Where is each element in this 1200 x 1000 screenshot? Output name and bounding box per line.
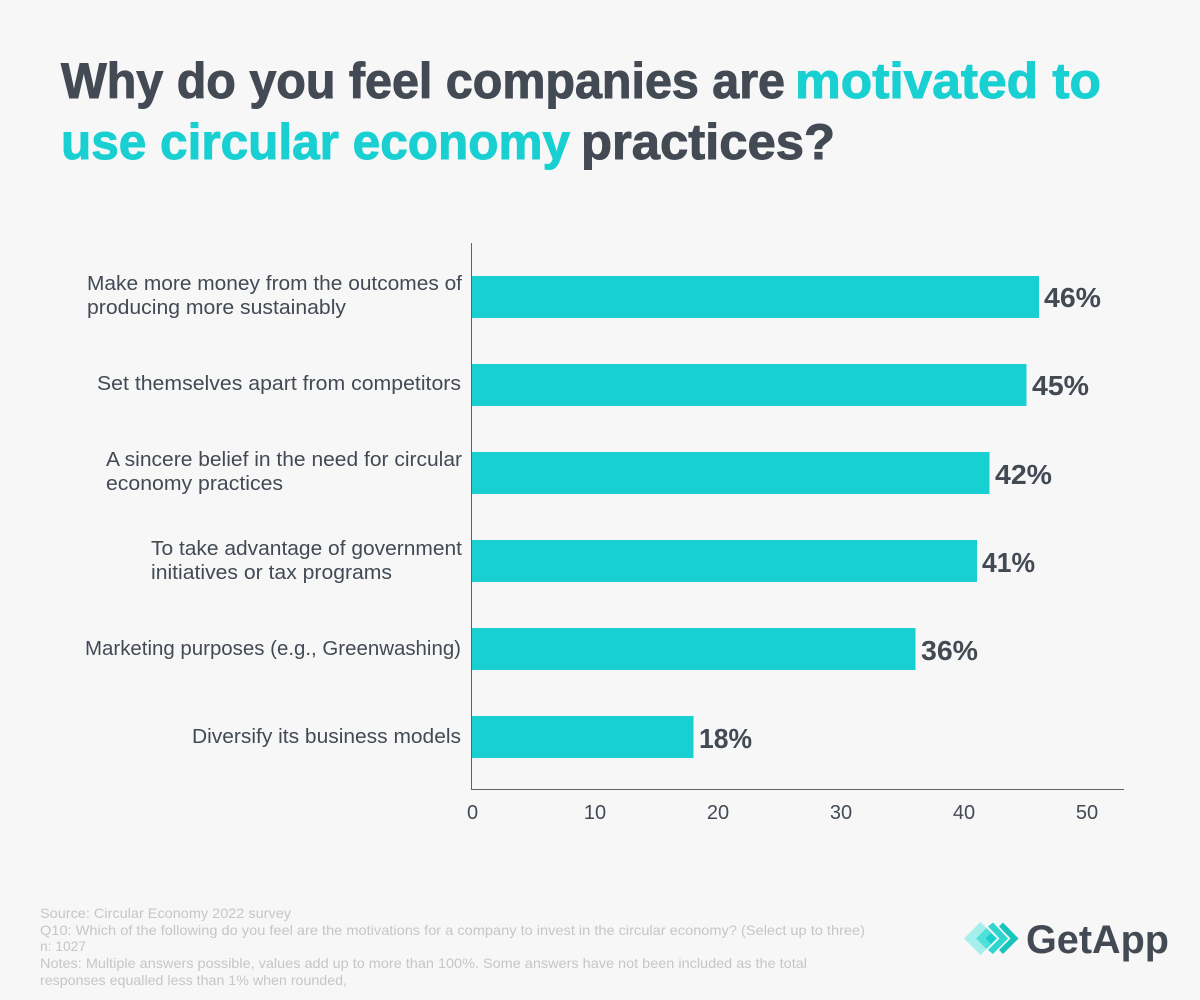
title: practices?	[581, 114, 835, 170]
x axis ticks: 50	[1076, 802, 1098, 824]
source notes: n: 1027	[40, 938, 86, 954]
icon: logo diamonds	[964, 922, 1018, 955]
source notes: Source: Circular Economy 2022 survey	[40, 905, 291, 921]
category labels: To take advantage of government	[151, 538, 462, 560]
category labels: economy practices	[106, 473, 283, 495]
x axis ticks: 0	[467, 802, 478, 824]
x axis ticks: 40	[953, 802, 975, 824]
value labels: 42%	[995, 459, 1052, 490]
value labels: 36%	[921, 635, 978, 666]
logo: GetApp	[964, 918, 1169, 962]
bar chart	[85, 243, 1124, 824]
source notes: responses equalled less than 1% when rounded,	[40, 972, 347, 988]
category labels	[85, 273, 462, 748]
category labels: Marketing purposes (e.g., Greenwashing)	[85, 638, 461, 660]
title: Why do you feel companies are	[61, 53, 785, 109]
value labels	[699, 282, 1101, 754]
source notes: Notes: Multiple answers possible, values add up to more than 100%. Some answers have not been included as the total	[40, 955, 807, 971]
value labels: 18%	[699, 723, 752, 754]
category labels: initiatives or tax programs	[151, 562, 392, 584]
value labels: 41%	[982, 547, 1035, 578]
category labels: Make more money from the outcomes of	[87, 273, 462, 295]
x axis ticks: 20	[707, 802, 729, 824]
value labels: 45%	[1032, 370, 1089, 401]
source notes: Q10: Which of the following do you feel are the motivations for a company to invest in the circular economy? (Select up to three)	[40, 922, 865, 938]
x axis ticks: 30	[830, 802, 852, 824]
logo wordmark: GetApp	[1026, 918, 1169, 962]
axes	[472, 243, 1124, 790]
title: motivated to	[795, 53, 1101, 109]
title	[61, 53, 1101, 170]
x axis ticks	[467, 802, 1098, 824]
x axis ticks: 10	[584, 802, 606, 824]
category labels: A sincere belief in the need for circular	[106, 449, 462, 471]
source notes	[40, 905, 865, 988]
title: use circular economy	[61, 114, 570, 170]
category labels: producing more sustainably	[87, 297, 346, 319]
category labels: Diversify its business models	[192, 726, 461, 748]
value labels: 46%	[1044, 282, 1101, 313]
category labels: Set themselves apart from competitors	[97, 373, 461, 395]
bars	[472, 276, 1039, 758]
